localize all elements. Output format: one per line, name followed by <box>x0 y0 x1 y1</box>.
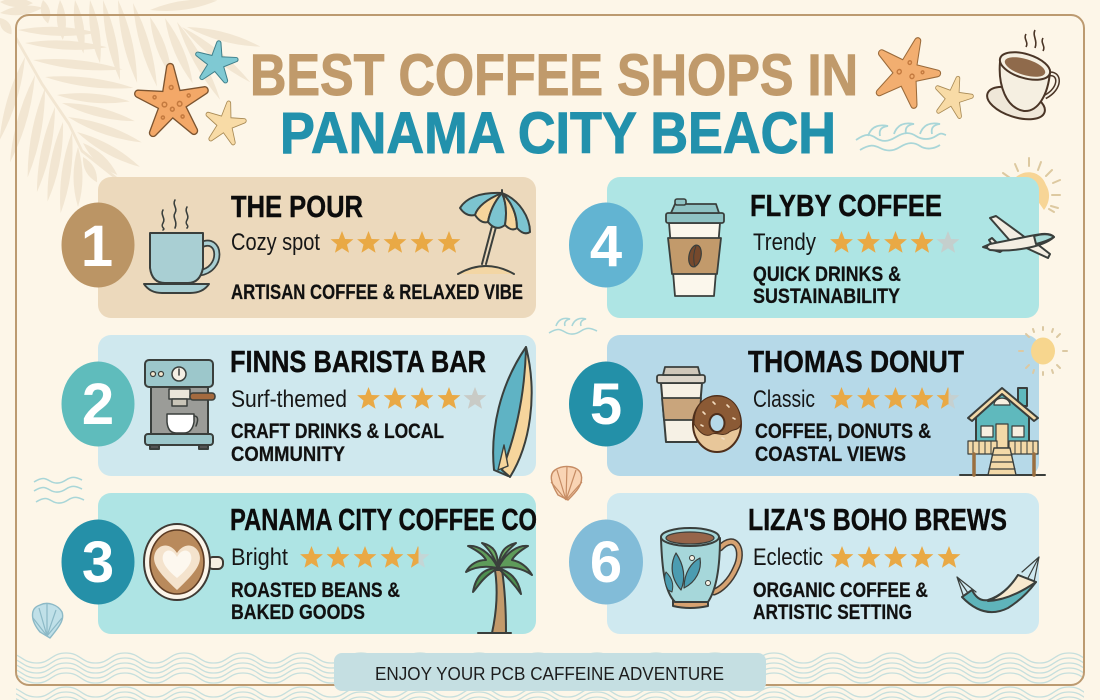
tagline <box>231 420 444 466</box>
number badge 4: 4 <box>590 214 622 279</box>
tagline: ORGANIC COFFEE & <box>753 579 928 602</box>
icon: shell blue <box>32 603 63 638</box>
panel: Thomas Donut <box>569 335 1045 476</box>
icon: coffee and donut <box>657 367 741 452</box>
panel: Finns Barista Bar <box>62 335 536 477</box>
icon: cup <box>144 200 217 293</box>
tagline <box>231 579 400 624</box>
descriptor: Bright <box>231 544 288 571</box>
starfish sand right <box>932 74 975 118</box>
descriptor: Classic <box>753 386 815 413</box>
descriptor: Cozy spot <box>231 229 320 256</box>
icon: espresso machine <box>145 360 215 449</box>
tagline: CRAFT DRINKS & LOCAL <box>231 420 444 443</box>
tagline: QUICK DRINKS & <box>753 263 901 286</box>
panel: Flyby Coffee <box>569 177 1054 318</box>
tagline <box>753 579 928 624</box>
tagline <box>755 420 931 466</box>
rating stars <box>830 387 959 409</box>
number badge 2 <box>62 362 134 446</box>
shop name: PANAMA CITY COFFEE CO <box>230 502 537 537</box>
descriptor: Trendy <box>753 229 816 256</box>
icon: surfboard <box>493 347 532 477</box>
icon: plane <box>983 216 1054 258</box>
icon: small sun <box>1019 327 1067 375</box>
title line 2: PANAMA CITY BEACH <box>280 101 836 166</box>
number badge 3: 3 <box>82 530 114 595</box>
shop name: FLYBY COFFEE <box>750 188 942 223</box>
tagline: COFFEE, DONUTS & <box>755 420 931 443</box>
panel: Panama City Coffee Co <box>62 493 537 634</box>
shop name: THOMAS DONUT <box>748 344 964 379</box>
icon: beach house <box>960 388 1045 475</box>
starfish sand <box>204 100 247 144</box>
icon: beach umbrella <box>458 190 530 274</box>
palm fronds <box>0 0 262 214</box>
icon: waves top right <box>856 123 946 150</box>
wave band <box>0 653 1098 700</box>
icon: shell peach <box>551 466 582 500</box>
rating stars <box>830 231 959 253</box>
number badge 6: 6 <box>590 530 622 595</box>
title line 1: BEST COFFEE SHOPS IN <box>250 43 858 108</box>
tagline: ARTISAN COFFEE & RELAXED VIBE <box>231 281 523 304</box>
number badge 5 <box>569 362 643 446</box>
shop name: FINNS BARISTA BAR <box>230 344 486 379</box>
footer banner <box>334 653 766 691</box>
rating stars <box>331 231 460 253</box>
rating stars <box>300 546 429 568</box>
starfish orange <box>137 65 207 134</box>
icon: hammock <box>957 557 1039 612</box>
title <box>250 43 858 166</box>
descriptor: Surf-themed <box>231 386 347 413</box>
footer text: ENJOY YOUR PCB CAFFEINE ADVENTURE <box>375 664 724 684</box>
icon: palm tree <box>466 543 532 633</box>
tagline <box>753 263 901 308</box>
icon: takeaway cup <box>666 199 724 296</box>
starfish orange right <box>869 31 946 109</box>
number badge 6 <box>569 520 643 604</box>
starfish teal <box>195 40 238 82</box>
number badge 1 <box>62 202 134 288</box>
tagline: ROASTED BEANS & <box>231 579 400 602</box>
rating stars <box>357 387 486 409</box>
icon: starfish group right <box>869 31 975 118</box>
icon: latte <box>144 524 223 600</box>
tagline: SUSTAINABILITY <box>753 285 900 308</box>
icon: sun behind card 4 <box>1003 158 1060 212</box>
tagline: ARTISTIC SETTING <box>753 601 912 624</box>
number badge 4 <box>569 202 643 288</box>
icon: boho mug <box>661 528 739 608</box>
panel: Liza's Boho Brews <box>569 493 1039 634</box>
number badge 3 <box>62 520 134 604</box>
icon: waves centre <box>549 318 597 334</box>
tagline: BAKED GOODS <box>231 601 365 624</box>
tagline: COMMUNITY <box>231 443 345 466</box>
shop name: THE POUR <box>231 189 363 224</box>
shop name: LIZA'S BOHO BREWS <box>748 502 1007 537</box>
descriptor: Eclectic <box>753 544 823 571</box>
icon: starfish group left <box>137 40 247 144</box>
icon: coffee cup with saucer <box>983 30 1058 126</box>
panel: The Pour <box>62 177 536 318</box>
number badge 2: 2 <box>82 372 114 437</box>
rating stars <box>831 546 960 568</box>
tagline: COASTAL VIEWS <box>755 443 906 466</box>
icon: waves left <box>34 477 84 503</box>
number badge 5: 5 <box>590 372 622 437</box>
number badge 1: 1 <box>81 214 113 279</box>
